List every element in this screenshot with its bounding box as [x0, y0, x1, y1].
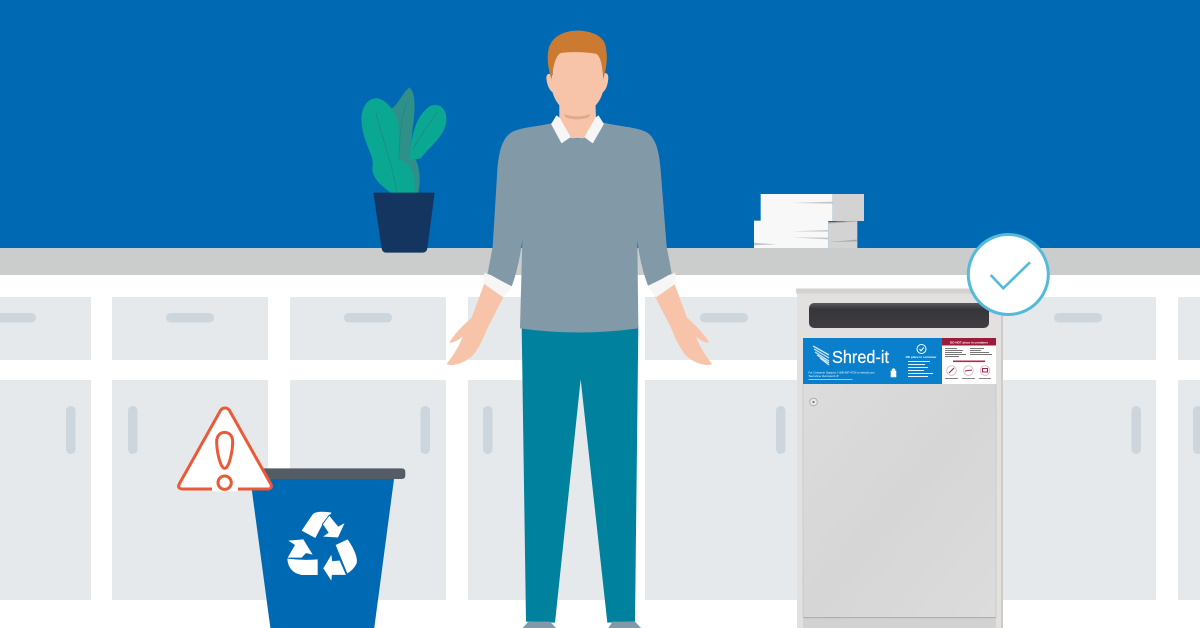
prohibited list — [945, 348, 992, 357]
recycling symbol — [287, 512, 357, 582]
door — [803, 384, 996, 617]
cuffs — [483, 273, 676, 297]
console top lip — [796, 288, 1001, 294]
exclamation mark — [217, 432, 233, 489]
paper slot — [809, 303, 989, 328]
trousers — [522, 327, 641, 628]
Shred-it label — [803, 338, 996, 384]
prohibited icons — [947, 366, 990, 375]
upper body — [447, 31, 712, 365]
warning icon — [179, 408, 271, 491]
padlock icon — [891, 368, 896, 377]
container heading: OK place in container — [906, 355, 937, 359]
logo wordmark: Shred-it — [832, 347, 889, 367]
collar — [552, 116, 603, 143]
bin rim — [263, 468, 405, 479]
plant pot — [373, 193, 435, 253]
support text: For Customer Support: 1-800-697-4733 or shredit.com — [808, 372, 875, 374]
support text second line: Service Account # — [808, 375, 840, 378]
blue wall — [0, 0, 1200, 248]
head — [546, 50, 608, 115]
stacked papers — [754, 194, 864, 248]
neck — [559, 100, 596, 138]
warning triangle — [179, 408, 271, 489]
container badge — [917, 344, 926, 354]
right arm — [655, 283, 712, 365]
container list — [908, 361, 933, 377]
hair — [548, 31, 607, 79]
prohibited captions — [945, 377, 991, 380]
cabinets — [0, 297, 1200, 600]
warning line — [953, 360, 985, 362]
left arm — [447, 283, 504, 365]
door lock — [810, 398, 817, 406]
plant leaves — [361, 87, 446, 193]
logo mark — [813, 346, 829, 365]
sweater — [488, 123, 672, 332]
shredder console — [796, 288, 1003, 628]
bin body — [250, 479, 394, 628]
neck shadow — [564, 114, 591, 119]
potted plant — [361, 87, 446, 253]
recycling bin — [250, 468, 405, 628]
prohibited heading: DO NOT place in container — [950, 340, 989, 344]
person — [447, 31, 712, 628]
console body — [797, 293, 1003, 628]
bottom panel — [803, 617, 996, 628]
counter top — [0, 248, 1200, 275]
check mark badge — [968, 234, 1048, 314]
